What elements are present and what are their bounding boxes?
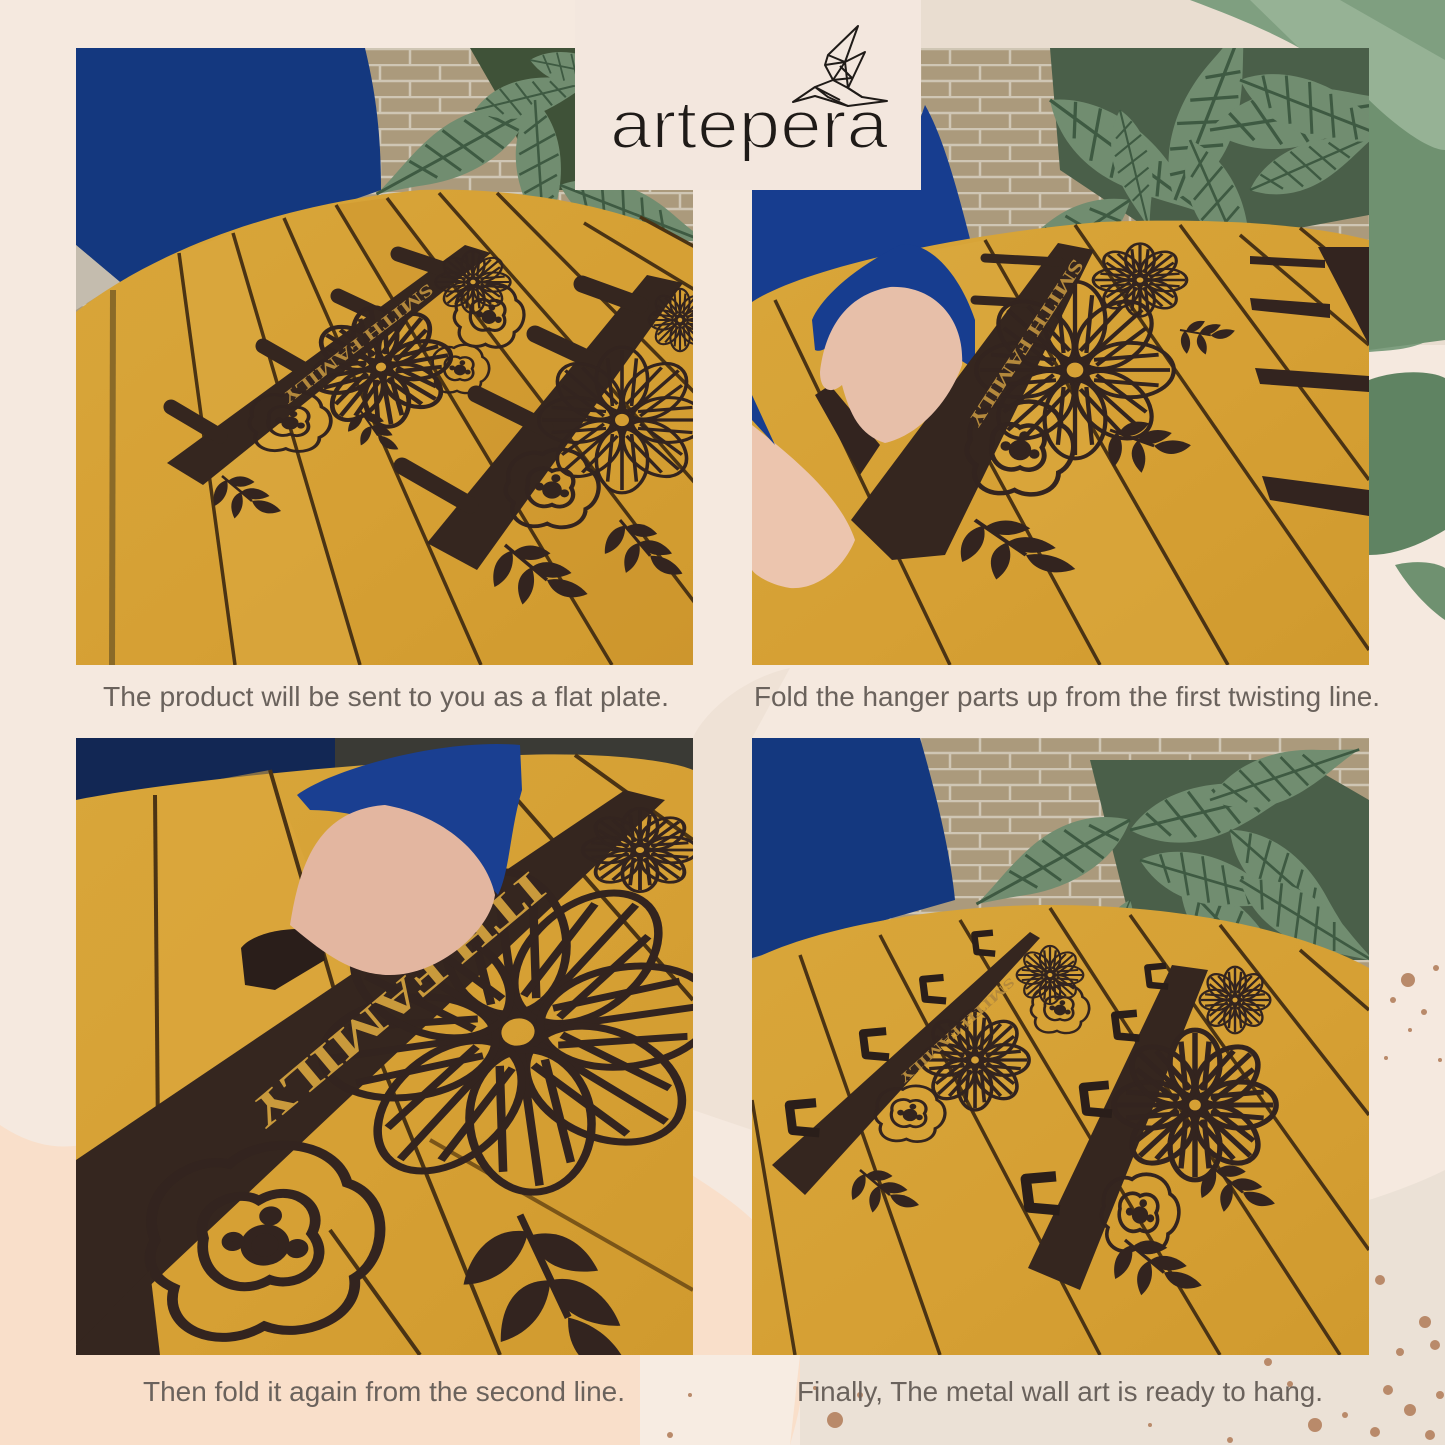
- sweater: [752, 105, 975, 310]
- metal plate 2 tabs: [1250, 247, 1369, 516]
- sweater: [76, 48, 381, 282]
- caption step 3: Then fold it again from the second line.: [143, 1376, 625, 1407]
- table: [752, 221, 1369, 665]
- logo wordmark: artepera: [610, 87, 888, 163]
- gold glitter specks: [667, 965, 1444, 1443]
- metal plate: ITH FAMILY: [240, 862, 555, 1138]
- plant: [376, 48, 693, 242]
- metal plate 1: [815, 243, 1238, 580]
- plant: [976, 748, 1369, 960]
- panel: step 3 photo: [76, 738, 693, 1355]
- hand lower: [752, 425, 855, 588]
- table: [76, 754, 693, 1355]
- slat gaps: [155, 755, 693, 1355]
- metal plate 1: SMITH FAMILY: [896, 975, 1018, 1087]
- metal plate 2: [1022, 963, 1276, 1295]
- caption step 1: The product will be sent to you as a flat plate.: [103, 681, 669, 712]
- metal plate 1: [167, 245, 524, 518]
- sleeve: [812, 245, 975, 370]
- metal plate 2: [402, 275, 711, 604]
- hand: [290, 805, 495, 975]
- slat gaps: [775, 225, 1369, 665]
- plant: [1041, 48, 1369, 228]
- decorative leaves, top right: [1190, 0, 1445, 620]
- metal plate: [76, 790, 693, 1355]
- slat gaps: [752, 908, 1369, 1355]
- metal plate 1: [772, 930, 1089, 1212]
- metal plate 1: SMITH FAMILY: [279, 280, 437, 408]
- panel: step 1 photo: [76, 46, 715, 665]
- sweater: [752, 738, 955, 958]
- folded tab: [241, 929, 325, 990]
- panel: step 4 photo: [752, 726, 1387, 1355]
- table: [76, 190, 693, 665]
- panel: step 2 photo: [752, 48, 1369, 665]
- metal plate 1: SMITH FAMILY: [963, 255, 1087, 431]
- logo box: [575, 0, 921, 190]
- icon: origami bird: [793, 26, 887, 106]
- sleeve: [297, 744, 522, 895]
- table: [752, 905, 1369, 1355]
- slat gaps: [112, 193, 695, 665]
- hand upper: [820, 287, 962, 443]
- caption step 2: Fold the hanger parts up from the first twisting line.: [754, 681, 1380, 712]
- caption step 4: Finally, The metal wall art is ready to hang.: [797, 1376, 1323, 1407]
